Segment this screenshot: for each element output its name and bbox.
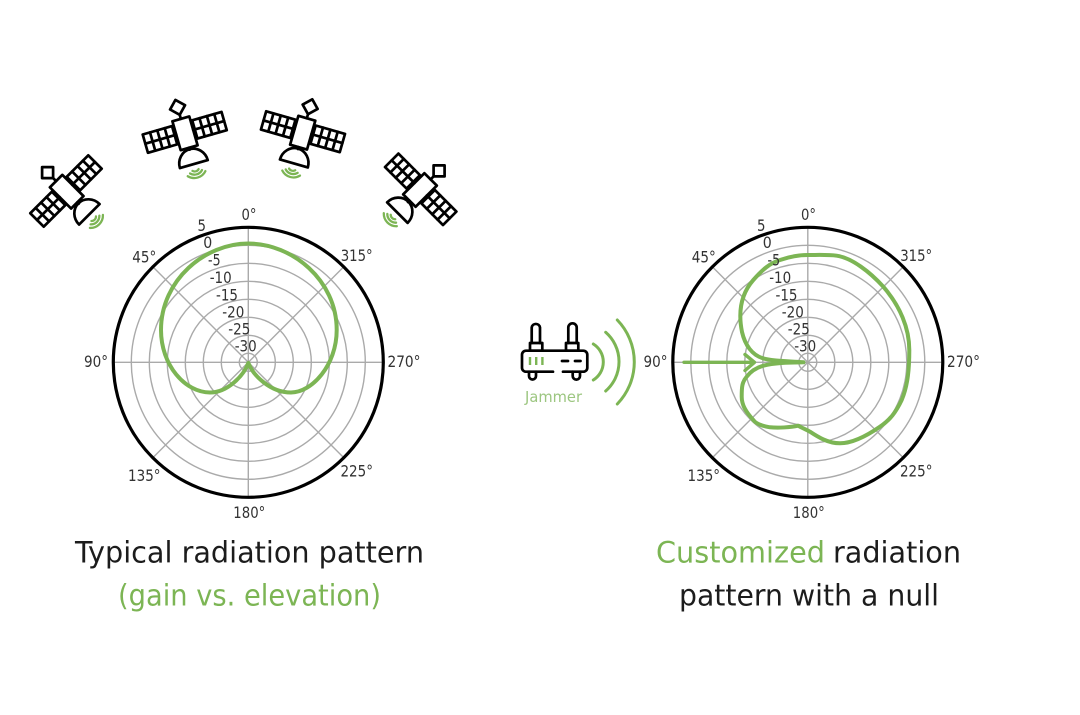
angle labels: left chart: 90° <box>84 352 108 371</box>
angle labels: right chart: 135° <box>688 466 720 485</box>
angle labels: right chart: 225° <box>900 462 932 480</box>
chart: customized radiation pattern polar plot <box>673 227 943 497</box>
gain scale labels: right chart: -20 <box>782 302 804 322</box>
gain scale labels: left chart: -5 <box>208 250 221 270</box>
angle labels: right chart: 90° <box>644 352 668 371</box>
jammer label: Jammer <box>524 388 583 406</box>
gain scale labels: left chart: 5 <box>197 216 206 235</box>
angle labels: left chart: 135° <box>128 466 161 485</box>
angle labels: left chart: 225° <box>340 462 373 480</box>
icon: satellite upper left <box>136 89 237 189</box>
icon: jammer device <box>522 323 587 380</box>
gain scale labels: left chart <box>197 216 257 356</box>
gain curve: typical <box>161 244 337 392</box>
chart: typical radiation pattern polar plot <box>113 227 383 497</box>
angle labels: left chart: 45° <box>132 248 156 266</box>
angle labels: left chart: 270° <box>388 352 420 371</box>
gain scale labels: right chart: -5 <box>768 250 780 270</box>
icon: satellite upper right <box>251 88 352 188</box>
gain curve: customized with null <box>740 255 909 443</box>
icon: jammer signal waves <box>593 320 634 404</box>
gain scale labels: right chart: -25 <box>788 320 810 338</box>
gain scale labels: right chart: -10 <box>769 268 791 287</box>
angle labels: left chart: 315° <box>341 246 373 265</box>
angle labels: left chart <box>84 205 420 522</box>
gain scale labels: left chart: 0 <box>203 233 212 252</box>
gain scale labels: left chart: -20 <box>222 302 244 322</box>
gain scale labels: right chart: 0 <box>763 233 772 252</box>
heading: customized radiation pattern: pattern with a null <box>679 578 939 612</box>
icon: satellite far left <box>13 138 128 253</box>
angle labels: left chart: 0° <box>242 205 256 224</box>
gain scale labels: left chart: -30 <box>235 336 257 356</box>
gain scale labels: right chart <box>757 216 816 356</box>
gain scale labels: left chart: -15 <box>216 286 238 304</box>
heading: customized radiation pattern: radiation <box>833 536 961 570</box>
angle labels: right chart: 270° <box>947 352 980 371</box>
gain scale labels: right chart: -15 <box>776 286 798 304</box>
arrow: jamming signal into null <box>684 354 754 370</box>
heading: customized radiation pattern <box>656 536 961 612</box>
icon: satellite far right <box>358 136 474 252</box>
angle labels: right chart: 180° <box>793 503 825 522</box>
heading: typical radiation pattern: Typical radiation pattern <box>74 536 424 570</box>
heading: typical radiation pattern <box>74 536 424 612</box>
angle labels: right chart: 0° <box>801 205 816 224</box>
heading: typical radiation pattern: (gain vs. elevation) <box>118 578 381 612</box>
angle labels: right chart: 315° <box>900 246 932 265</box>
angle labels: right chart <box>644 205 980 522</box>
angle labels: left chart: 180° <box>233 503 265 522</box>
angle labels: right chart: 45° <box>692 248 716 266</box>
gain scale labels: left chart: -25 <box>228 320 250 338</box>
gain scale labels: left chart: -10 <box>210 268 232 287</box>
gain scale labels: right chart: 5 <box>757 216 765 235</box>
gain scale labels: right chart: -30 <box>794 336 816 356</box>
heading: customized radiation pattern: Customized <box>656 536 825 570</box>
